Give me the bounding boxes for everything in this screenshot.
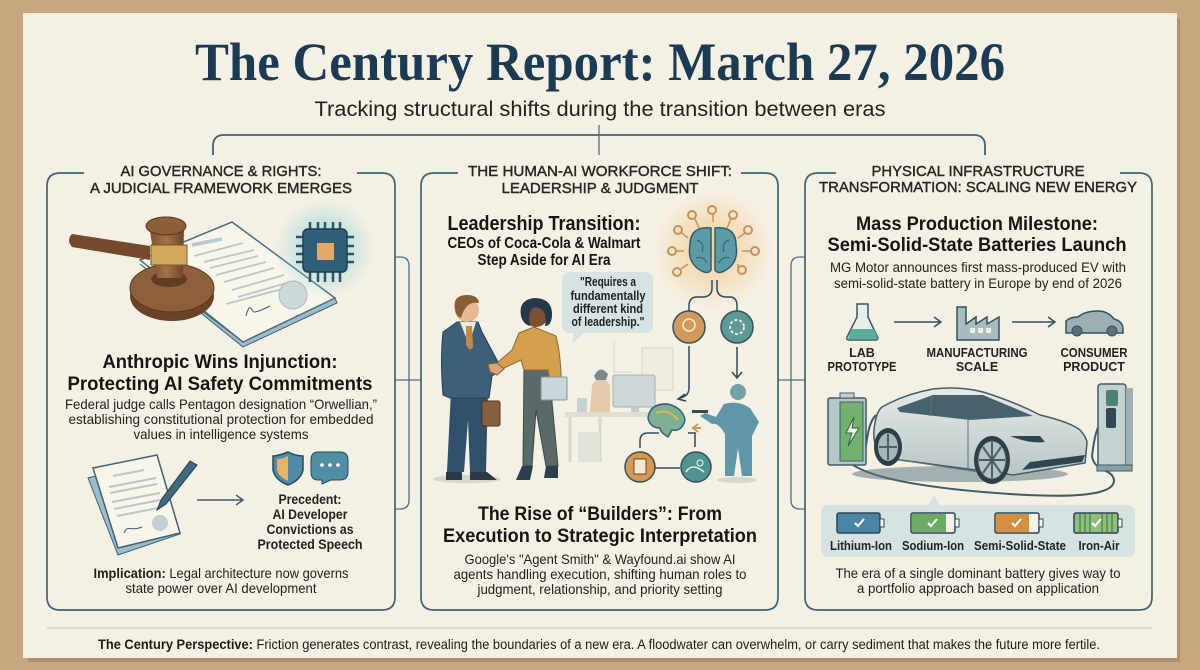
speech bubble quote: of leadership." xyxy=(572,315,645,329)
legend labels: Lithium-Ion xyxy=(830,539,892,553)
connector: brain to circles xyxy=(640,433,695,468)
office background scene xyxy=(565,342,673,462)
text: injunction body: values in intelligence systems xyxy=(134,426,308,442)
speech bubble quote: "Requires a xyxy=(580,275,637,289)
panel: workforce shift xyxy=(421,163,778,610)
legend labels xyxy=(830,539,1120,553)
battery: lithium-ion xyxy=(837,513,884,533)
text: implication: Implication: Legal architecture now governs xyxy=(94,565,348,581)
icon: colored brain xyxy=(648,404,685,437)
figure: strategic human xyxy=(692,384,759,483)
icon: signed papers and pen xyxy=(88,455,197,555)
text: pipeline labels: PRODUCT xyxy=(1063,360,1125,374)
text: builders headline: The Rise of “Builders”: From xyxy=(478,503,722,525)
icon: shield xyxy=(273,452,303,485)
arrow: to brain xyxy=(693,424,701,432)
connector lines xyxy=(678,280,742,401)
icon: AI chip xyxy=(275,198,375,298)
text: pipeline labels xyxy=(828,346,1128,374)
battery: semi-solid-state xyxy=(995,513,1043,533)
icon: charging cable xyxy=(850,415,1114,496)
subtitle: Tracking structural shifts during the transition between eras xyxy=(314,98,886,121)
icon: orange head circle xyxy=(673,311,705,343)
text: pipeline labels: PROTOTYPE xyxy=(828,360,896,374)
text: builders headline xyxy=(443,503,757,547)
text: milestone headline xyxy=(828,213,1126,256)
icon: flask xyxy=(847,304,878,340)
text: precedent: AI Developer xyxy=(272,507,348,522)
icon: speech bubble xyxy=(311,452,348,484)
icon: teal gears circle xyxy=(721,311,753,343)
text: leadership headline xyxy=(448,213,640,269)
panel heading xyxy=(819,163,1137,196)
footer rule xyxy=(47,627,1152,629)
text: milestone body: MG Motor announces first mass-produced EV with xyxy=(830,260,1126,275)
speech bubble quote: fundamentally xyxy=(570,289,646,303)
panel heading xyxy=(468,163,732,197)
figure: businessman xyxy=(433,295,501,483)
text: injunction body xyxy=(65,396,377,442)
text: implication xyxy=(94,565,348,596)
text: injunction body: Federal judge calls Pentagon designation “Orwellian,” xyxy=(65,396,377,412)
text: portfolio conclusion: a portfolio approach based on application xyxy=(857,580,1099,596)
legend labels: Iron-Air xyxy=(1078,539,1120,553)
text: builders body: judgment, relationship, and priority setting xyxy=(477,581,722,597)
text: precedent: Precedent: xyxy=(278,492,342,507)
icon: orange checklist circle xyxy=(625,452,655,482)
text: precedent: Convictions as xyxy=(266,522,354,537)
legend labels: Semi-Solid-State xyxy=(974,539,1066,553)
illustration: electric car xyxy=(852,388,1087,484)
text: pipeline labels: MANUFACTURING xyxy=(926,346,1028,360)
panel heading: TRANSFORMATION: SCALING NEW ENERGY xyxy=(819,179,1137,196)
text: milestone body xyxy=(830,260,1126,291)
text: leadership headline: Step Aside for AI Era xyxy=(478,252,611,269)
text: injunction body: establishing constitutional protection for embedded xyxy=(68,411,374,427)
icon: teal cycle circle xyxy=(681,452,711,482)
panel frame xyxy=(421,173,778,610)
panel heading: A JUDICIAL FRAMEWORK EMERGES xyxy=(90,180,352,197)
panel heading: PHYSICAL INFRASTRUCTURE xyxy=(872,163,1084,180)
text: precedent xyxy=(258,492,362,552)
speech bubble quote: different kind xyxy=(573,302,643,316)
arrow xyxy=(894,317,941,327)
icon: legal document xyxy=(140,222,337,347)
icon: factory xyxy=(957,307,999,340)
panel heading: LEADERSHIP & JUDGMENT xyxy=(502,180,698,197)
panel heading: THE HUMAN-AI WORKFORCE SHIFT: xyxy=(468,163,732,180)
text: builders headline: Execution to Strategic Interpretation xyxy=(443,525,757,547)
text: pipeline labels: LAB xyxy=(849,346,875,360)
diagram: brain with nodes xyxy=(653,190,773,310)
icon: charging station xyxy=(1097,384,1133,471)
panel frame xyxy=(805,173,1152,610)
text: injunction headline: Protecting AI Safety Commitments xyxy=(68,373,373,395)
text: milestone headline: Semi-Solid-State Batteries Launch xyxy=(828,234,1126,256)
arrow xyxy=(1012,317,1055,327)
speech bubble quote xyxy=(562,272,653,344)
title: The Century Report: March 27, 2026 xyxy=(195,32,1005,92)
connectors: header to panels xyxy=(213,125,985,509)
text: pipeline labels: CONSUMER xyxy=(1060,346,1128,360)
panel: AI governance xyxy=(47,163,395,610)
text: portfolio conclusion xyxy=(836,565,1121,596)
battery: sodium-ion xyxy=(911,513,959,533)
text: precedent: Protected Speech xyxy=(258,537,362,552)
text: leadership headline: CEOs of Coca-Cola & Walmart xyxy=(448,235,640,252)
legend labels: Sodium-Ion xyxy=(902,539,964,553)
icon: gavel xyxy=(69,217,214,321)
text: builders body xyxy=(454,551,747,597)
icon: large battery xyxy=(828,393,866,465)
legend: battery chemistries xyxy=(821,495,1135,557)
figure: businesswoman xyxy=(497,298,567,480)
battery: iron-air xyxy=(1074,513,1122,533)
text: portfolio conclusion: The era of a single dominant battery gives way to xyxy=(836,565,1121,581)
text: injunction headline xyxy=(68,351,373,395)
text: implication: state power over AI development xyxy=(126,580,317,596)
text: milestone headline: Mass Production Milestone: xyxy=(856,213,1098,235)
text: builders body: Google's "Agent Smith" & Wayfound.ai show AI xyxy=(464,551,736,567)
footer: century perspective: The Century Perspective: Friction generates contrast, revealing the boundaries of a new era. A floodwater can overwhelm, or carry sediment that makes the future more fertile. xyxy=(98,637,1100,652)
icon: small car xyxy=(1066,311,1123,336)
text: builders body: agents handling execution, shifting human roles to xyxy=(454,566,747,582)
text: injunction headline: Anthropic Wins Injunction: xyxy=(102,351,338,373)
text: pipeline labels: SCALE xyxy=(956,360,998,374)
text: leadership headline: Leadership Transition: xyxy=(448,213,640,235)
panel: infrastructure xyxy=(805,163,1152,610)
panel heading xyxy=(90,163,352,197)
text: milestone body: semi-solid-state battery in Europe by end of 2026 xyxy=(834,276,1122,291)
arrow xyxy=(197,495,243,505)
panel frame xyxy=(47,173,395,610)
icon: handshake xyxy=(488,363,504,375)
panel heading: AI GOVERNANCE & RIGHTS: xyxy=(120,163,322,180)
